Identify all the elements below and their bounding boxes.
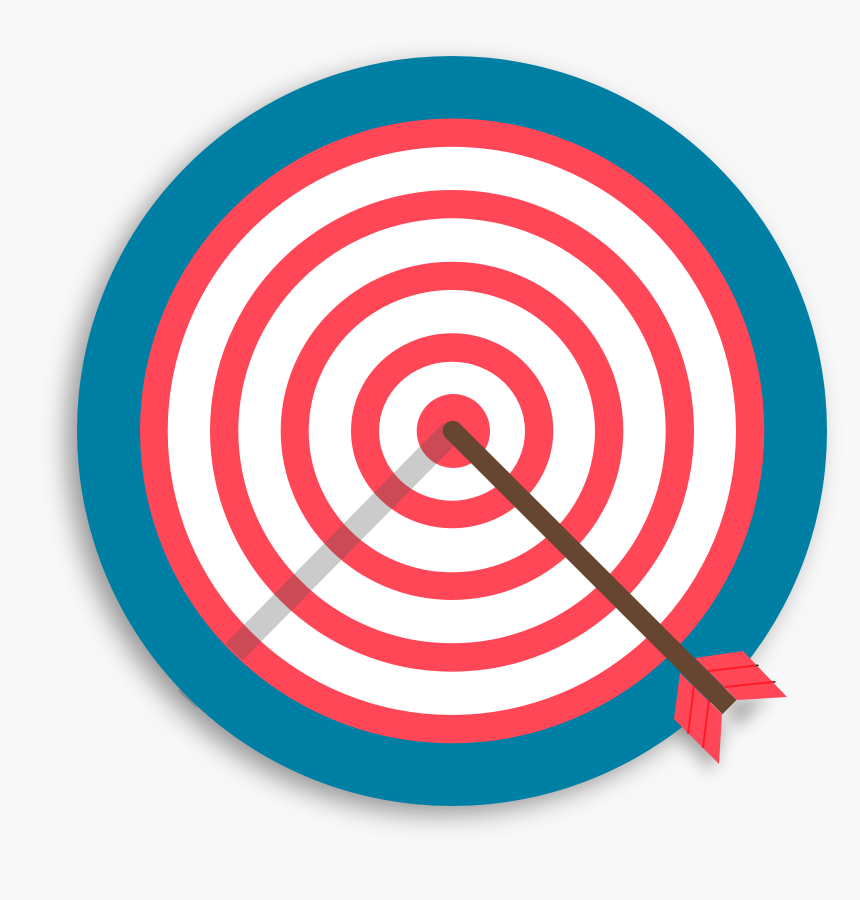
concentric target rings [140, 118, 764, 743]
shadow of arrow feathers [676, 690, 770, 772]
arrow [443, 421, 787, 764]
drop shadow of target [67, 66, 815, 814]
small shadow fragment at disc edge [178, 680, 208, 708]
fletching lines [688, 666, 773, 748]
fletching line tips [756, 665, 776, 682]
arrow shadow on target [234, 431, 452, 652]
outer blue disc [77, 56, 827, 806]
upper fletching [695, 651, 787, 700]
arrow tip [443, 421, 463, 441]
arrow shaft [453, 431, 730, 707]
lower fletching [674, 673, 722, 764]
